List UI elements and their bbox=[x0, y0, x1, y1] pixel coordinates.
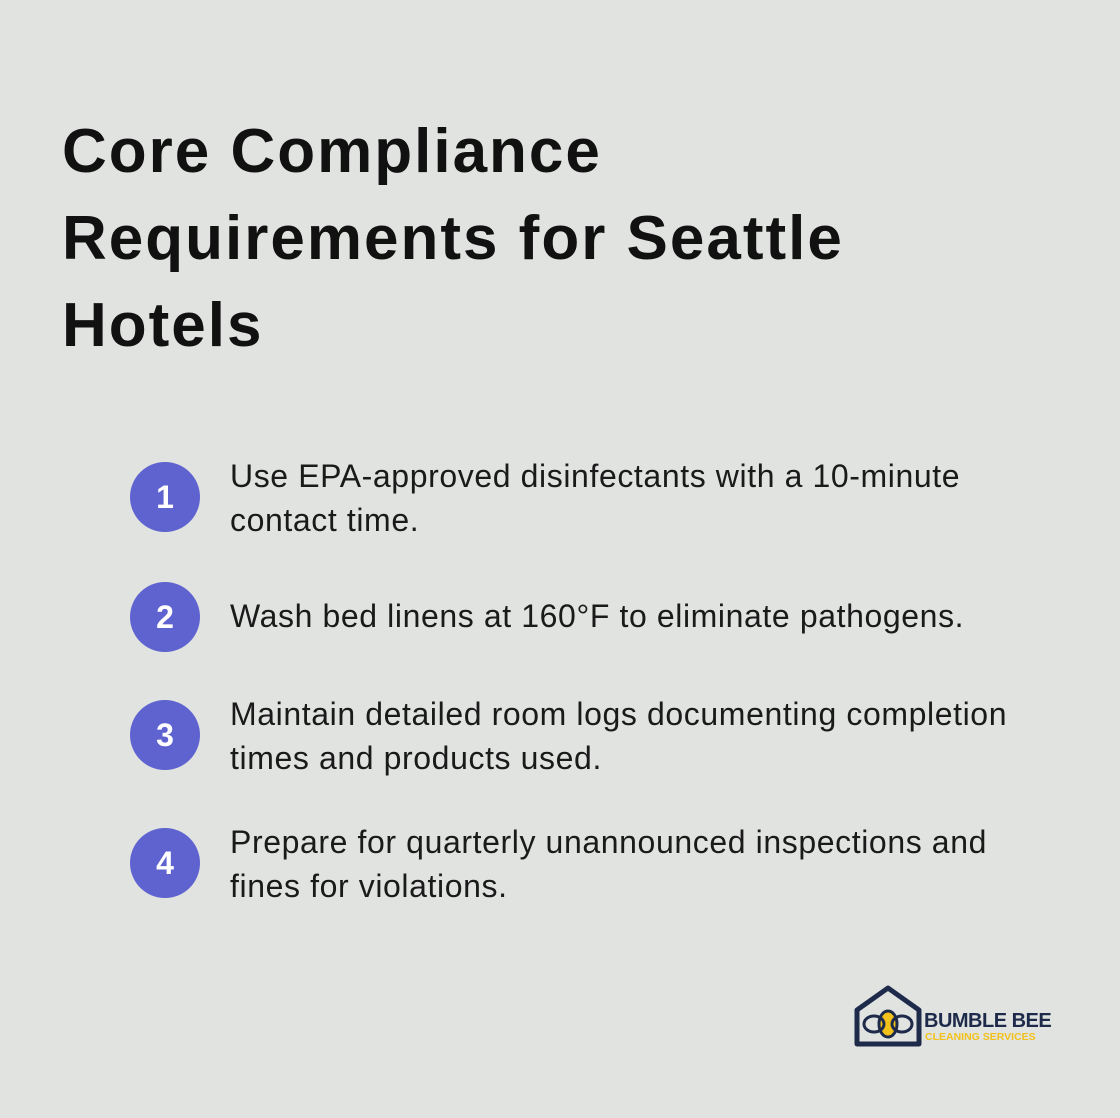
item 1: 1 bbox=[156, 479, 174, 515]
item 3 bbox=[130, 696, 1007, 776]
item 3: times and products used. bbox=[230, 740, 602, 776]
item 4 bbox=[130, 824, 987, 904]
item 4: fines for violations. bbox=[230, 868, 508, 904]
item 4: Prepare for quarterly unannounced inspections and bbox=[230, 824, 987, 860]
item 1: Use EPA-approved disinfectants with a 10-minute bbox=[230, 458, 960, 494]
logo text: BUMBLE BEE bbox=[924, 1010, 1051, 1032]
logo: CLEANING SERVICES bbox=[925, 1031, 1036, 1043]
title bbox=[62, 117, 844, 360]
item 3: Maintain detailed room logs documenting completion bbox=[230, 696, 1007, 732]
item 2: Wash bed linens at 160°F to eliminate pathogens. bbox=[230, 598, 964, 634]
title: Core Compliance bbox=[62, 117, 602, 186]
item 3: 3 bbox=[156, 717, 174, 753]
item 2: 2 bbox=[156, 599, 174, 635]
icon: bee house bbox=[854, 986, 922, 1046]
title: Requirements for Seattle bbox=[62, 204, 844, 273]
item 1: contact time. bbox=[230, 502, 419, 538]
logo bbox=[854, 986, 1051, 1046]
item 2 bbox=[130, 582, 964, 652]
item 1 bbox=[130, 458, 960, 538]
title: Hotels bbox=[62, 291, 263, 360]
item 4: 4 bbox=[156, 845, 174, 881]
